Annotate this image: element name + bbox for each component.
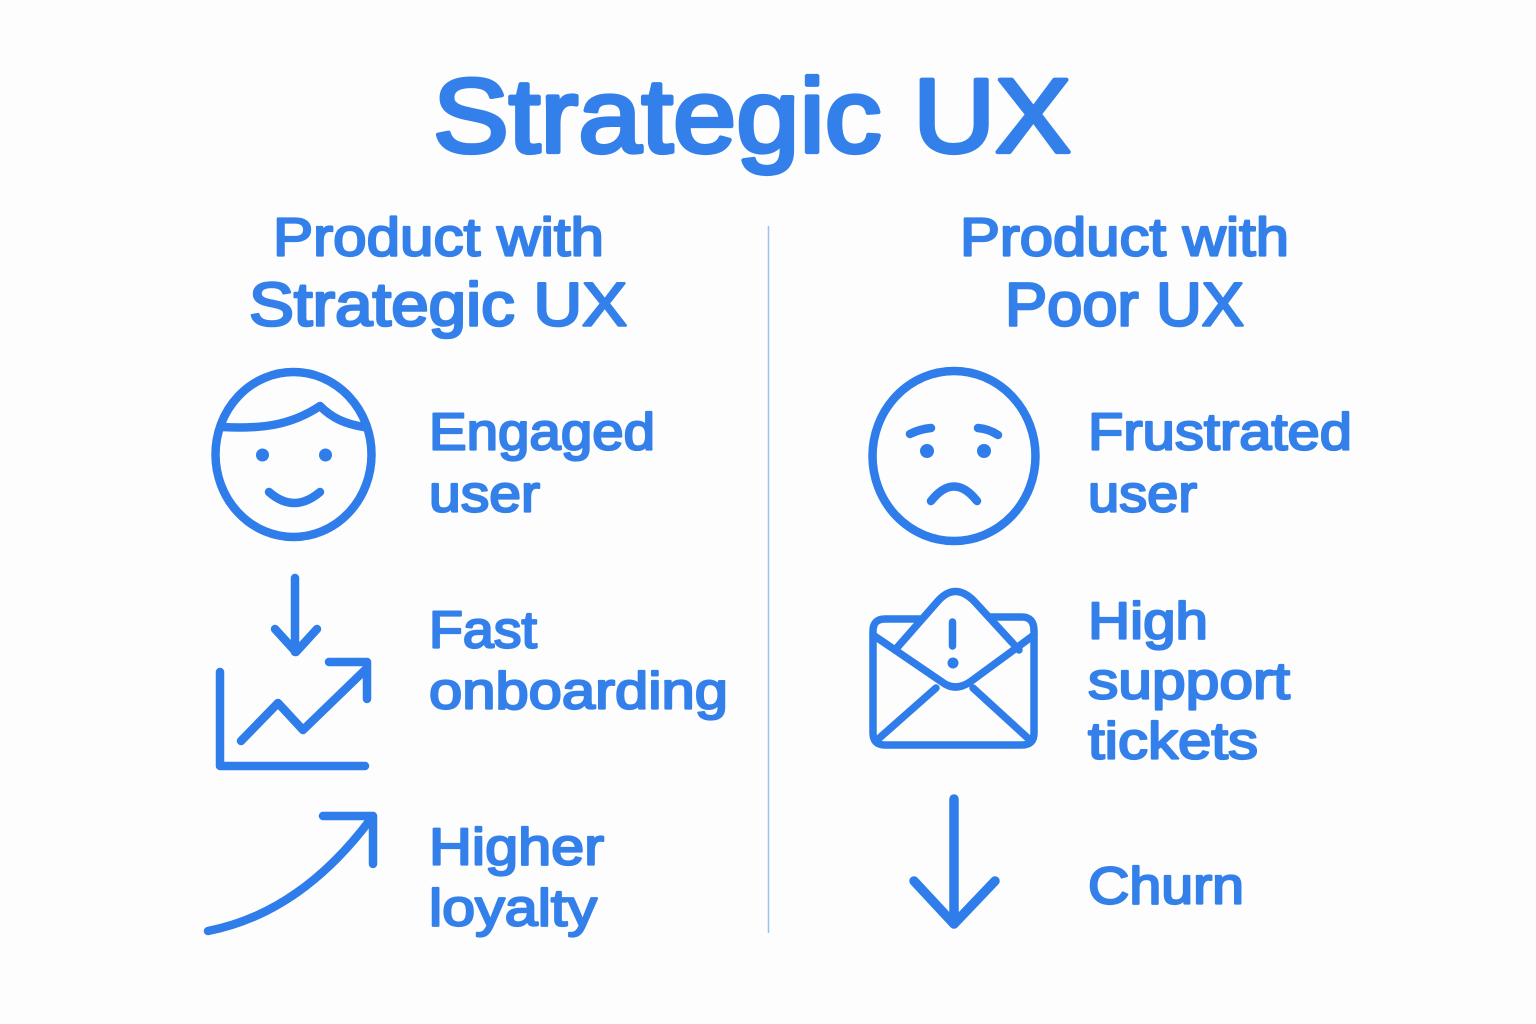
- arrow: churn down: [914, 799, 995, 924]
- icon: smiling user face: [216, 372, 372, 537]
- label: engaged user: [429, 404, 655, 524]
- arrow: down to onboarding: [275, 578, 317, 652]
- label: fast onboarding: [429, 602, 728, 720]
- label: high support tickets: tickets: [1088, 712, 1258, 770]
- label: frustrated user: user: [1088, 466, 1197, 524]
- label: high support tickets: [1088, 592, 1291, 770]
- heading: right column: Product with: [960, 208, 1289, 268]
- icon: sad user face: [872, 371, 1036, 541]
- panel: product with strategic UX: [208, 208, 728, 938]
- title: Strategic UX: [433, 58, 1071, 175]
- label: fast onboarding: onboarding: [429, 662, 728, 720]
- label: engaged user: Engaged: [429, 404, 655, 462]
- panel: product with poor UX: [872, 208, 1352, 924]
- heading: right column: Poor UX: [1005, 270, 1244, 338]
- label: churn: Churn: [1088, 858, 1244, 916]
- label: fast onboarding: Fast: [429, 602, 538, 660]
- label: higher loyalty: loyalty: [429, 880, 597, 938]
- label: high support tickets: High: [1088, 592, 1208, 650]
- label: frustrated user: [1088, 404, 1352, 524]
- label: higher loyalty: [429, 818, 604, 938]
- center divider: [768, 226, 770, 933]
- heading: left column: Strategic UX: [249, 270, 627, 338]
- heading: left column: Product with: [273, 208, 604, 268]
- icon: growth chart: [220, 662, 367, 766]
- label: engaged user: user: [429, 466, 540, 524]
- arrow: rising curve: [208, 816, 373, 931]
- label: high support tickets: support: [1088, 652, 1291, 710]
- heading: left column: [249, 208, 627, 338]
- label: frustrated user: Frustrated: [1088, 404, 1352, 462]
- heading: right column: [960, 208, 1289, 338]
- icon: alert envelope: [873, 592, 1034, 745]
- label: higher loyalty: Higher: [429, 818, 604, 876]
